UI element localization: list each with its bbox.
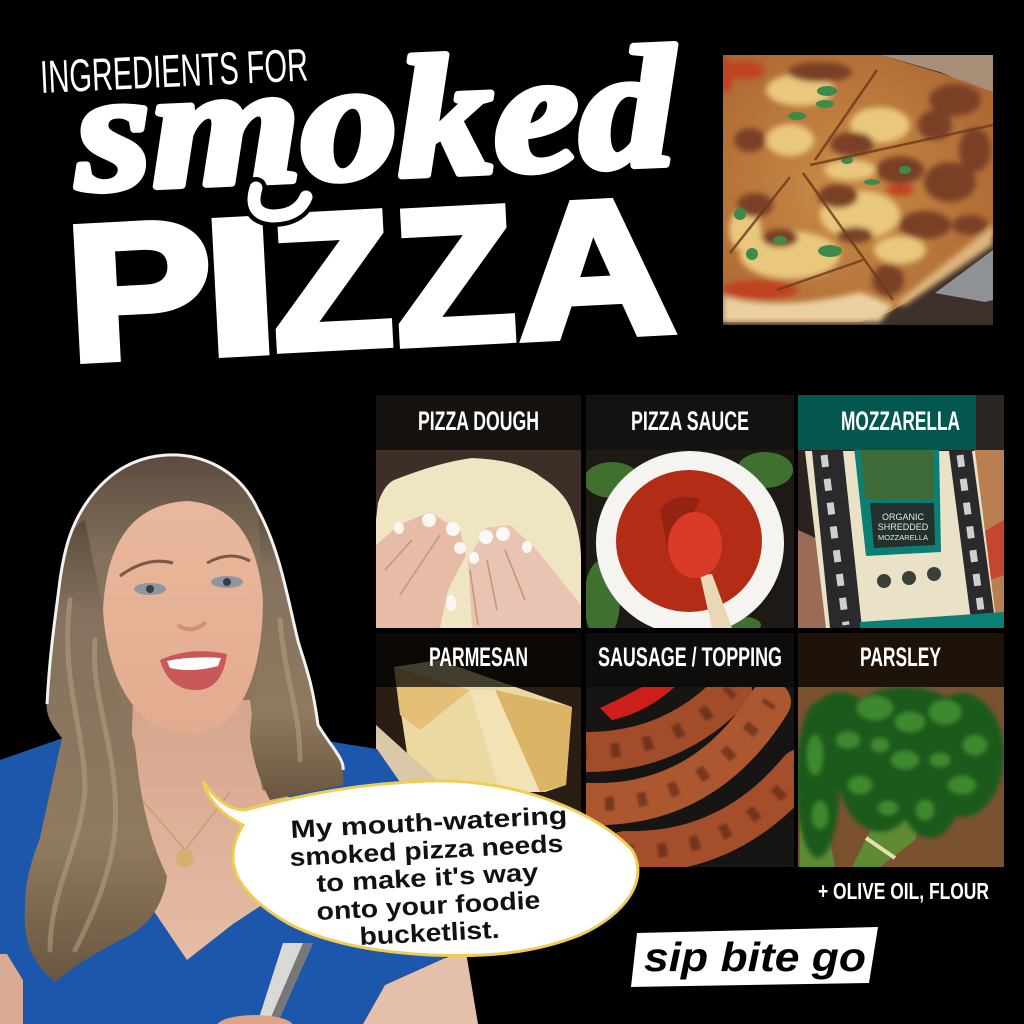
shirt (0, 738, 445, 1024)
right hand (468, 525, 581, 628)
dough (376, 458, 581, 628)
necklace (143, 792, 230, 867)
tile: mozzarella (798, 395, 1004, 628)
hair white outline (47, 455, 343, 770)
label: MOZZARELLA (841, 406, 960, 436)
bubble text: smoked pizza needs (289, 830, 564, 872)
face (103, 501, 263, 734)
bubble text: onto your foodie (316, 886, 541, 926)
tile: sausage (572, 633, 800, 867)
tile: pizza sauce (584, 395, 794, 640)
photo: smoked pizza (717, 55, 993, 325)
bubble text: bucketlist. (359, 916, 500, 951)
title: ingredients for: INGREDIENTS FOR (39, 38, 309, 103)
sauce (616, 470, 762, 612)
label: PARMESAN (429, 642, 528, 672)
back hair (25, 455, 343, 982)
title: pizza: Z (266, 170, 397, 391)
label: SAUSAGE / TOPPING (598, 642, 782, 672)
tongs (257, 943, 313, 1024)
nails (394, 513, 532, 611)
label: PARSLEY (860, 642, 941, 672)
bowl (596, 451, 784, 635)
arm left (0, 954, 23, 1024)
title: pizza: I (197, 177, 284, 396)
brows (120, 556, 250, 576)
title: pizza: Z (389, 165, 520, 386)
neck and chest (130, 700, 300, 960)
nose (178, 622, 206, 629)
logo: sip bite go: sip bite go (644, 934, 866, 980)
title: pizza: P (61, 179, 218, 401)
hand (798, 530, 826, 628)
stems (852, 818, 917, 867)
package label: ORGANIC (882, 512, 924, 522)
bubble text: to make it's way (316, 858, 539, 898)
title: pizza: A (511, 157, 679, 380)
logo: sip bite go (631, 927, 878, 987)
package label: MOZZARELLA (878, 533, 928, 542)
bag (805, 451, 997, 628)
label: PIZZA DOUGH (418, 406, 539, 436)
title: smoked: smoked (70, 12, 682, 228)
hand (217, 1015, 293, 1024)
bubble text: My mouth-watering (290, 802, 568, 844)
tile: parmesan (376, 633, 581, 812)
mouth (160, 651, 227, 690)
bubble shape (203, 781, 638, 956)
package label (854, 447, 941, 556)
title: smoked tail curl (254, 188, 306, 216)
hair right front (250, 510, 343, 800)
hair left front (25, 520, 167, 982)
tile: parsley (796, 633, 1004, 867)
bubble text (289, 802, 568, 951)
side package (974, 450, 1004, 628)
arm right (363, 952, 478, 1024)
title: pizza (61, 157, 679, 401)
seals (877, 567, 941, 588)
hair highlights (50, 600, 300, 950)
tile: pizza dough (376, 395, 581, 628)
spoon (700, 574, 732, 628)
package label: SHREDDED (878, 522, 929, 532)
speech bubble (203, 781, 638, 956)
left hand (376, 512, 466, 628)
eyes (134, 576, 243, 595)
person: woman host (0, 455, 478, 1024)
label: PIZZA SAUCE (631, 406, 749, 436)
